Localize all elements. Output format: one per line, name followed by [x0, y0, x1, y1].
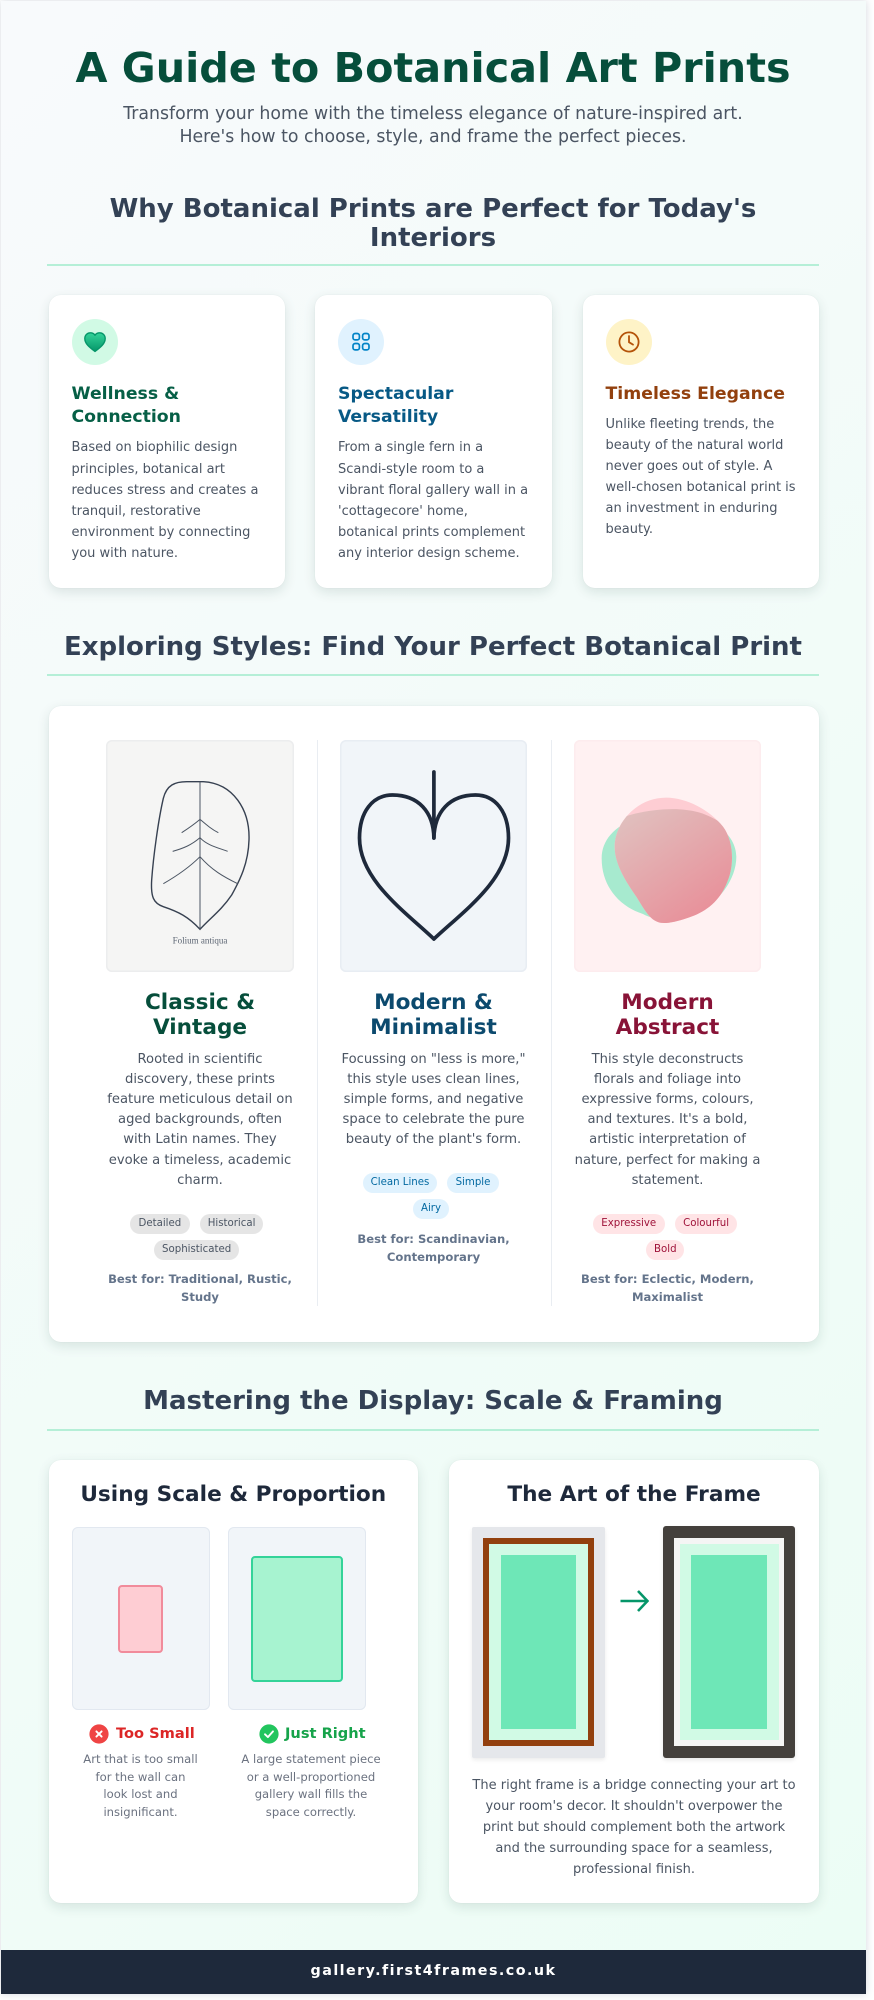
text: frame explanation: professional finish. [573, 1862, 695, 1877]
style description: this style uses clean lines, [347, 1072, 520, 1087]
card text: environment by connecting [72, 525, 250, 540]
column: modern abstract [574, 740, 761, 1304]
subtitle: Here's how to choose, style, and frame the perfect pieces. [179, 126, 687, 146]
style title [370, 990, 497, 1040]
style description [341, 1052, 526, 1147]
panel: elegance card [582, 295, 819, 588]
panel heading: Using Scale & Proportion [80, 1482, 386, 1507]
style description: and textures. It's a bold, [587, 1112, 748, 1127]
card heading: Wellness & [72, 384, 179, 404]
card text: principles, botanical art [72, 462, 225, 477]
card heading [338, 384, 454, 427]
style description: aged backgrounds, often [118, 1112, 282, 1127]
best for [357, 1232, 510, 1264]
card text: never goes out of style. A [606, 459, 772, 474]
style description [107, 1052, 293, 1188]
text: frame explanation [472, 1778, 796, 1877]
text: too small description: Art that is too small [83, 1752, 198, 1766]
tag: Historical [208, 1218, 255, 1228]
card text: beauty. [606, 522, 653, 537]
panel: versatility card [315, 295, 552, 588]
text: frame explanation: The right frame is a bridge connecting your art to [472, 1778, 796, 1793]
tag [675, 1214, 737, 1234]
tag: Detailed [138, 1218, 181, 1228]
style description: artistic interpretation of [589, 1132, 746, 1147]
style description: with Latin names. They [123, 1132, 277, 1147]
style description: Rooted in scientific [138, 1052, 262, 1066]
tag [413, 1199, 449, 1219]
subtitle [123, 104, 743, 146]
style description: evoke a timeless, academic [109, 1153, 291, 1168]
icon: arrow [620, 1590, 649, 1612]
illustration: vintage leaf print: Folium antiqua [173, 936, 227, 946]
text: just right description: space correctly. [266, 1805, 356, 1819]
text: frame explanation: print but should complement both the artwork [483, 1820, 785, 1835]
card heading: Spectacular [338, 384, 453, 404]
card text: well-chosen botanical print is [606, 480, 796, 495]
diagram: too small art on wall [72, 1526, 210, 1710]
style title: Minimalist [370, 1015, 497, 1040]
card text: an investment in enduring [606, 501, 778, 516]
footer: gallery.first4frames.co.uk [311, 1963, 556, 1979]
panel: wellness card [48, 295, 285, 588]
style description: Focussing on "less is more," [341, 1052, 526, 1066]
text: frame explanation: and the surrounding space for a seamless, [495, 1841, 773, 1856]
style title [616, 990, 719, 1040]
tag: Sophisticated [162, 1244, 231, 1255]
icon: heart [72, 319, 118, 365]
card text: tranquil, restorative [72, 504, 201, 519]
card text [606, 417, 796, 537]
card text [338, 440, 528, 561]
text: too small description: for the wall can [96, 1770, 185, 1784]
card text: you with nature. [72, 546, 178, 561]
illustration: vintage leaf print [106, 740, 294, 972]
text: too small description: insignificant. [103, 1805, 178, 1819]
best for: Study [181, 1290, 219, 1304]
best for: Best for: Traditional, Rustic, [108, 1272, 292, 1286]
tag: Airy [421, 1203, 441, 1214]
subtitle: Transform your home with the timeless elegance of nature-inspired art. [123, 104, 743, 124]
style description: feature meticulous detail on [107, 1092, 293, 1107]
tag: Clean Lines [371, 1177, 429, 1188]
style description: space to celebrate the pure [343, 1112, 524, 1127]
heading: why botanical prints: Interiors [370, 222, 496, 252]
heading: exploring styles: Exploring Styles: Find Your Perfect Botanical Print [64, 632, 802, 662]
card text: 'cottagecore' home, [338, 504, 468, 519]
footer [1, 1950, 866, 1994]
tag: Colourful [683, 1218, 729, 1228]
style title: Vintage [153, 1015, 247, 1040]
style description: This style deconstructs [592, 1052, 743, 1066]
card heading: Versatility [338, 407, 438, 427]
style description: charm. [177, 1173, 223, 1188]
icon: cross [89, 1724, 109, 1744]
card heading [72, 384, 181, 427]
best for: Contemporary [387, 1250, 480, 1264]
text: just right description: A large statement piece [241, 1752, 381, 1766]
tag [646, 1240, 684, 1260]
tag: Simple [456, 1177, 490, 1188]
best for: Maximalist [632, 1290, 703, 1304]
text: frame explanation: your room's decor. It shouldn't overpower the [485, 1799, 783, 1814]
panel: styles [48, 706, 819, 1342]
card text: botanical prints complement [338, 525, 525, 540]
card heading: Connection [72, 407, 181, 427]
best for [108, 1272, 292, 1304]
card text: Scandi-style room to a [338, 462, 484, 477]
column: classic and vintage [106, 740, 294, 1304]
best for: Best for: Scandinavian, [357, 1232, 510, 1246]
diagram: well matched frame [663, 1526, 795, 1758]
icon: clock [606, 319, 652, 365]
card text: any interior design scheme. [338, 546, 520, 561]
card text: reduces stress and creates a [72, 483, 258, 498]
heading: mastering the display: Mastering the Display: Scale & Framing [143, 1386, 723, 1416]
tag: Expressive [601, 1218, 656, 1228]
tag [363, 1173, 437, 1193]
style title: Classic & [145, 990, 255, 1014]
style title: Modern & [374, 990, 493, 1014]
label: just right: Just Right [285, 1725, 366, 1742]
title: A Guide to Botanical Art Prints [75, 44, 791, 92]
card heading: Timeless Elegance [606, 384, 785, 404]
icon: grid [338, 319, 384, 365]
panel heading: The Art of the Frame [507, 1482, 761, 1507]
icon: check [259, 1724, 279, 1744]
tag [130, 1214, 190, 1234]
style description: simple forms, and negative [344, 1092, 523, 1107]
style description: florals and foliage into [594, 1072, 741, 1087]
style description: expressive forms, colours, [581, 1092, 754, 1107]
style description: beauty of the plant's form. [346, 1132, 521, 1147]
diagram: right size art on wall [228, 1526, 366, 1710]
style title [145, 990, 255, 1040]
card text: beauty of the natural world [606, 438, 783, 453]
label: too small: Too Small [116, 1725, 195, 1742]
heading: why botanical prints: Why Botanical Prints are Perfect for Today's [110, 194, 756, 224]
diagram: poorly matched frame [472, 1526, 605, 1758]
card text [72, 440, 258, 561]
best for [581, 1272, 754, 1304]
text: just right description [241, 1752, 381, 1819]
best for: Best for: Eclectic, Modern, [581, 1272, 754, 1286]
style description [575, 1052, 760, 1188]
tag: Bold [654, 1244, 677, 1255]
heading: why botanical prints [110, 194, 756, 252]
panel: scale and proportion [48, 1460, 418, 1903]
style description: nature, perfect for making a [575, 1153, 760, 1168]
text: too small description: look lost and [103, 1787, 178, 1801]
tag [200, 1214, 263, 1234]
style description: statement. [632, 1173, 703, 1188]
tag [447, 1173, 499, 1193]
text: too small description [83, 1752, 198, 1819]
illustration: abstract blobs [574, 740, 761, 972]
card text: From a single fern in a [338, 440, 483, 455]
tag [593, 1214, 664, 1234]
card text: Unlike fleeting trends, the [606, 417, 774, 432]
text: just right description: or a well-proportioned [247, 1770, 375, 1784]
style title: Modern [621, 990, 714, 1014]
card text: Based on biophilic design [72, 440, 237, 455]
text: just right description: gallery wall fills the [255, 1787, 367, 1801]
column: modern and minimalist [340, 740, 527, 1264]
card text: vibrant floral gallery wall in a [338, 483, 528, 498]
illustration: minimalist heart leaf [340, 740, 527, 972]
tag [154, 1240, 239, 1260]
panel: art of the frame [449, 1460, 819, 1903]
style description: discovery, these prints [125, 1072, 275, 1087]
style title: Abstract [616, 1015, 719, 1040]
